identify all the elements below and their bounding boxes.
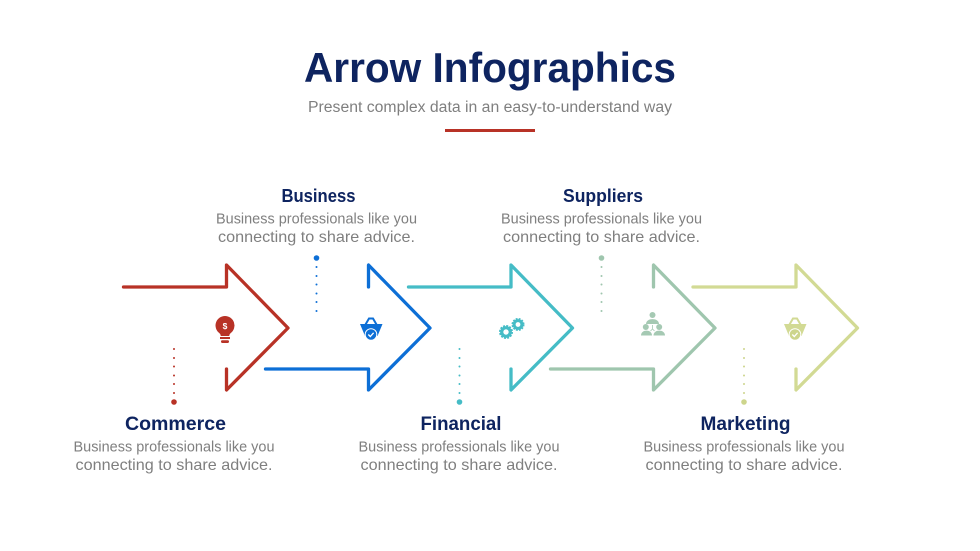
icon: light bulb: $ bbox=[223, 321, 228, 331]
text block: financial bbox=[358, 414, 560, 474]
text block: suppliers: Suppliers bbox=[563, 186, 643, 206]
subtitle: Present complex data in an easy-to-understand way bbox=[308, 99, 672, 116]
icon: light bulb bbox=[216, 316, 234, 343]
text block: marketing: Marketing bbox=[700, 414, 790, 435]
dotted connector: commerce bbox=[171, 348, 177, 405]
arrow: suppliers bbox=[550, 265, 715, 390]
title: Arrow Infographics bbox=[304, 44, 676, 91]
text block: suppliers: Business professionals like you bbox=[501, 210, 702, 228]
arrow: business bbox=[266, 265, 430, 390]
text block: financial: Business professionals like you bbox=[358, 438, 560, 456]
arrow: financial bbox=[408, 265, 572, 390]
text block: business: Business professionals like you bbox=[216, 210, 417, 228]
text block: commerce: connecting to share advice. bbox=[76, 457, 272, 474]
text block: business: Business bbox=[282, 186, 356, 206]
icon: people hierarchy bbox=[641, 312, 665, 336]
icon: gears bbox=[500, 319, 524, 338]
arrow: marketing bbox=[693, 265, 858, 390]
dotted connector: marketing bbox=[741, 348, 747, 405]
dotted connector: business bbox=[314, 255, 319, 312]
text block: suppliers bbox=[501, 186, 702, 246]
title underline bbox=[445, 129, 535, 132]
text block: suppliers: connecting to share advice. bbox=[503, 229, 700, 246]
text block: commerce: Commerce bbox=[125, 414, 226, 435]
icon: basket yellow bbox=[784, 318, 806, 340]
text block: business bbox=[216, 186, 417, 246]
text block: financial: connecting to share advice. bbox=[360, 457, 558, 474]
arrow: commerce bbox=[124, 265, 288, 390]
dotted connector: suppliers bbox=[599, 255, 604, 312]
text block: financial: Financial bbox=[420, 414, 502, 435]
text block: marketing: Business professionals like you bbox=[644, 438, 844, 456]
text block: marketing bbox=[644, 414, 844, 474]
dotted connector: financial bbox=[457, 348, 462, 405]
icon: basket blue bbox=[360, 318, 382, 340]
text block: business: connecting to share advice. bbox=[218, 229, 415, 246]
text block: commerce bbox=[74, 414, 274, 474]
text block: commerce: Business professionals like you bbox=[74, 438, 274, 456]
text block: marketing: connecting to share advice. bbox=[646, 457, 842, 474]
